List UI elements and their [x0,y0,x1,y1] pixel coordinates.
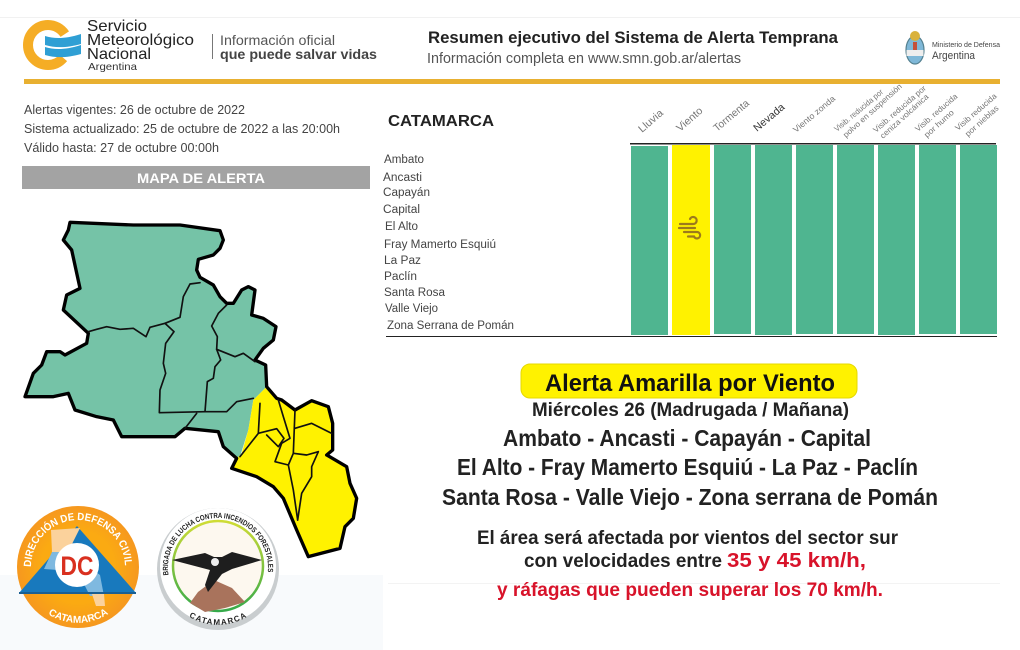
logo: Brigada de Lucha contra Incendios Forestales [157,508,279,630]
column headers: ceniza volcánica [878,92,931,140]
column headers: Viento zonda [791,93,837,135]
column headers: Visib. reducida por [871,84,928,135]
header: SMN logo: Servicio [87,18,147,35]
map: green departments [25,222,276,458]
column headers: Nevada [751,101,787,134]
column headers: Visib. reducida por [833,87,885,134]
department names: La Paz [384,255,421,267]
header: title: Información completa en www.smn.gob.ar/alertas [427,51,741,67]
department names [383,154,514,332]
column headers: Viento [674,105,705,134]
department names: Valle Viejo [385,303,438,315]
validity dates: Válido hasta: 27 de octubre 00:00h [24,141,219,155]
logo: Defensa Civil: CATAMARCA [49,609,108,623]
header: title [427,29,839,67]
alert description: 35 y 45 km/h, [727,550,866,572]
column headers [636,82,1001,140]
column headers: Visib reducida [953,91,999,133]
column headers: Tormenta [711,97,752,134]
header: SMN logo: Argentina [88,61,137,73]
logo: Brigada de Lucha contra Incendios Forestales: CATAMARCA [190,612,246,625]
department names: Ambato [384,154,424,166]
map: yellow departments [232,387,357,557]
column headers: por nieblas [963,104,1001,138]
alert description: y ráfagas que pueden superar los 70 km/h. [497,580,883,601]
header: slogan [212,33,377,62]
alert description [477,528,899,601]
validity dates: Sistema actualizado: 25 de octubre de 2022 a las 20:00h [24,122,340,136]
panel: alert table [383,82,1001,337]
map heading: MAPA DE ALERTA [137,171,265,186]
header: title: Resumen ejecutivo del Sistema de Alerta Temprana [428,29,839,47]
alert timing: Miércoles 26 (Madrugada / Mañana) [532,400,849,421]
logo: Defensa Civil: DIRECCIÓN DE DEFENSA CIVIL [24,512,132,566]
table title: CATAMARCA [388,113,494,130]
affected departments: Santa Rosa - Valle Viejo - Zona serrana de Pomán [442,484,938,510]
logo: Brigada de Lucha contra Incendios Forestales: BRIGADA DE LUCHA CONTRA INCENDIOS FORESTALES [162,512,274,576]
alert description: El área será afectada por vientos del sector sur [477,528,899,549]
icon: wind [679,217,700,238]
header: SMN logo: Meteorológico [87,32,194,49]
map: department borders [88,283,332,520]
map of Catamarca [25,222,357,557]
logo: Defensa Civil [17,506,139,628]
map heading [22,166,370,189]
column headers: por humo [922,108,956,139]
affected departments: Ambato - Ancasti - Capayán - Capital [503,425,871,451]
department names: El Alto [385,221,418,233]
column headers: Visib. reducida [913,92,960,134]
alert badge: Alerta Amarilla por Viento [545,370,835,397]
header: SMN logo [28,18,194,73]
logo: Defensa Civil: DC [60,551,94,581]
department names: Capayán [383,187,430,199]
department names: Zona Serrana de Pomán [387,320,514,332]
header: Ministerio de Defensa: Ministerio de Defensa [932,42,1000,49]
column headers: polvo en suspensión [841,82,904,139]
affected departments [442,425,938,510]
header: slogan: que puede salvar vidas [220,46,377,62]
header: Ministerio de Defensa: Argentina [932,50,976,62]
header: SMN logo: Nacional [87,46,151,63]
validity dates: Alertas vigentes: 26 de octubre de 2022 [24,103,245,117]
alert badge [521,364,857,398]
validity dates [24,103,340,155]
header: slogan: Información oficial [220,33,335,48]
header: Ministerio de Defensa [906,31,1000,64]
alert columns [631,145,997,335]
header rule [24,79,1000,84]
department names: Capital [383,204,420,216]
column headers: Lluvia [636,107,666,135]
map: province outline [25,222,357,557]
department names: Fray Mamerto Esquiú [384,239,496,251]
affected departments: El Alto - Fray Mamerto Esquiú - La Paz - Paclín [457,454,918,480]
department names: Ancasti [383,172,422,184]
department names: Santa Rosa [384,287,446,299]
department names: Paclín [384,271,417,283]
alert description: con velocidades entre [524,551,722,572]
